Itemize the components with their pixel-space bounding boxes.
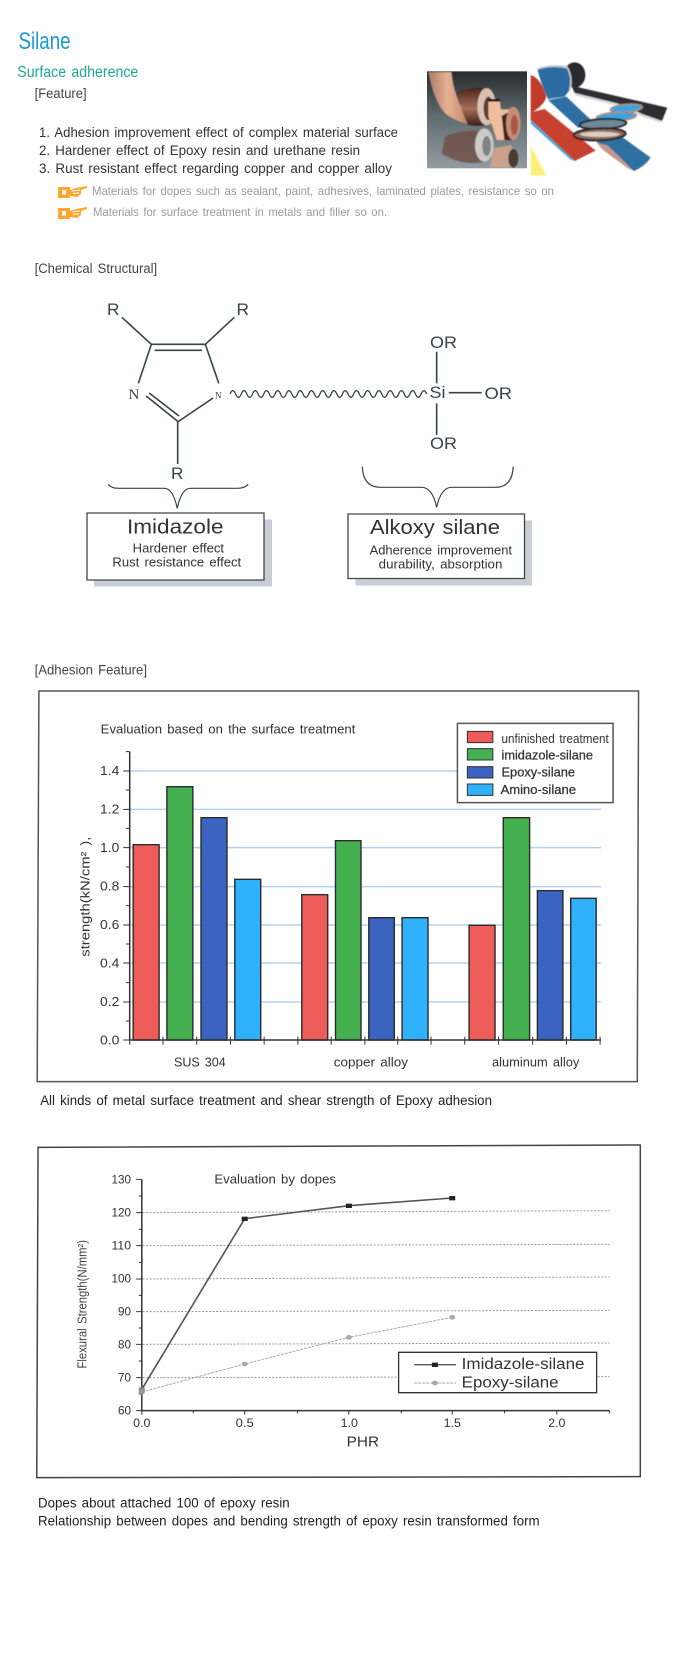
line chart legend — [399, 1352, 597, 1393]
box: imidazole — [87, 513, 272, 586]
title: Silane — [18, 28, 70, 55]
caption: bar chart: All kinds of metal surface treatment and shear strength of Epoxy adhesion — [40, 1093, 492, 1108]
chemical structure diagram: N — [128, 387, 140, 403]
line chart: evaluation by dopes: 110 — [112, 1239, 131, 1253]
bar chart: surface treatment: 0.8 — [100, 879, 119, 894]
line chart: evaluation by dopes: 60 — [118, 1404, 131, 1418]
caption: line chart — [38, 1495, 540, 1528]
bar chart: surface treatment: strength(kN/cm² ), — [78, 837, 92, 957]
bar chart: surface treatment: Evaluation based on the surface treatment — [101, 722, 356, 736]
chemical structure diagram: R — [236, 300, 249, 319]
icon: pointing hand bullet 2 — [58, 207, 87, 219]
line chart: evaluation by dopes: Imidazole-silane — [462, 1356, 584, 1373]
bar chart: surface treatment: 1.2 — [100, 801, 119, 816]
bar chart: surface treatment: SUS 304 — [174, 1055, 226, 1070]
box: alkoxy silane: Alkoxy silane — [370, 516, 500, 539]
chemical structure diagram: OR — [430, 333, 457, 352]
bar chart: surface treatment: 0.6 — [100, 917, 119, 932]
bar chart: surface treatment: 1.4 — [100, 763, 119, 778]
photo: copper foil rolls — [427, 71, 527, 168]
caption: line chart: Dopes about attached 100 of epoxy resin — [38, 1495, 290, 1510]
subtitle: surface adherence: Surface adherence — [17, 64, 138, 81]
caption: line chart: Relationship between dopes and bending strength of epoxy resin transformed form — [38, 1513, 540, 1528]
box: imidazole: Hardener effect — [133, 541, 225, 555]
line chart: evaluation by dopes: PHR — [347, 1434, 379, 1451]
box: alkoxy silane — [348, 514, 532, 586]
line chart: evaluation by dopes — [37, 1145, 640, 1478]
bar chart: surface treatment — [37, 691, 639, 1082]
line chart: evaluation by dopes: 1.5 — [444, 1416, 461, 1430]
heading: feature: [Feature] — [35, 86, 87, 101]
feature list — [39, 125, 398, 176]
feature list: 1. Adhesion improvement effect of complex material surface — [39, 125, 398, 140]
line chart: evaluation by dopes: 70 — [118, 1371, 131, 1385]
bar chart: surface treatment: 1.0 — [100, 840, 119, 855]
bar chart: surface treatment: imidazole-silane — [502, 748, 593, 762]
chemical structure diagram: R — [171, 464, 184, 483]
bar chart: surface treatment: 0.4 — [100, 955, 119, 970]
chart legend — [457, 723, 613, 803]
bar chart: surface treatment: copper alloy — [334, 1055, 409, 1070]
box: imidazole: Imidazole — [127, 515, 224, 538]
bar chart: surface treatment: 0.0 — [100, 1032, 119, 1047]
chemical structure diagram: OR — [430, 434, 457, 453]
note: materials for dopes: Materials for dopes such as sealant, paint, adhesives, laminated plates, resistance so on — [92, 184, 554, 198]
bar chart: surface treatment: Epoxy-silane — [502, 766, 575, 780]
box: alkoxy silane: durability, absorption — [379, 558, 502, 572]
chemical structure diagram: N — [215, 390, 222, 400]
line chart: evaluation by dopes: 0.0 — [133, 1416, 151, 1430]
photo: abrasive belts — [531, 62, 667, 176]
line chart: evaluation by dopes: 2.0 — [548, 1416, 566, 1430]
series: epoxy-silane — [139, 1315, 455, 1394]
series: imidazole-silane — [139, 1196, 455, 1392]
line chart: evaluation by dopes: 130 — [112, 1172, 131, 1186]
chemical structure diagram: OR — [484, 384, 512, 403]
box: imidazole: Rust resistance effect — [112, 555, 242, 569]
icon: pointing hand bullet 1 — [58, 186, 87, 198]
line chart: evaluation by dopes: 120 — [112, 1206, 131, 1220]
bar chart: surface treatment: aluminum alloy — [492, 1055, 580, 1070]
feature list: 3. Rust resistant effect regarding copper and copper alloy — [39, 161, 392, 176]
chemical structure diagram: R — [107, 300, 120, 319]
feature list: 2. Hardener effect of Epoxy resin and urethane resin — [39, 143, 360, 158]
heading: chemical structural: [Chemical Structural] — [35, 261, 157, 276]
bar chart: surface treatment: 0.2 — [100, 994, 119, 1009]
box: alkoxy silane: Adherence improvement — [370, 544, 513, 558]
line chart: evaluation by dopes: Evaluation by dopes — [214, 1172, 336, 1186]
line chart: evaluation by dopes: 100 — [112, 1272, 131, 1286]
line chart: evaluation by dopes: 1.0 — [341, 1416, 358, 1430]
bar chart: surface treatment: Amino-silane — [501, 783, 576, 797]
line chart: evaluation by dopes: 90 — [118, 1305, 131, 1319]
line chart: evaluation by dopes: Epoxy-silane — [462, 1375, 559, 1392]
line chart: evaluation by dopes: Flexural Strength(N/mm²) — [76, 1240, 90, 1368]
chemical structure diagram — [96, 297, 513, 508]
line chart: evaluation by dopes: 80 — [118, 1337, 131, 1351]
bar chart: surface treatment: unfinished treatment — [502, 732, 609, 746]
chemical structure diagram: Si — [430, 383, 446, 402]
note: surface treatment: Materials for surface treatment in metals and filler so on. — [93, 205, 387, 219]
heading: adhesion feature: [Adhesion Feature] — [35, 663, 147, 678]
line chart: evaluation by dopes: 0.5 — [236, 1416, 254, 1430]
